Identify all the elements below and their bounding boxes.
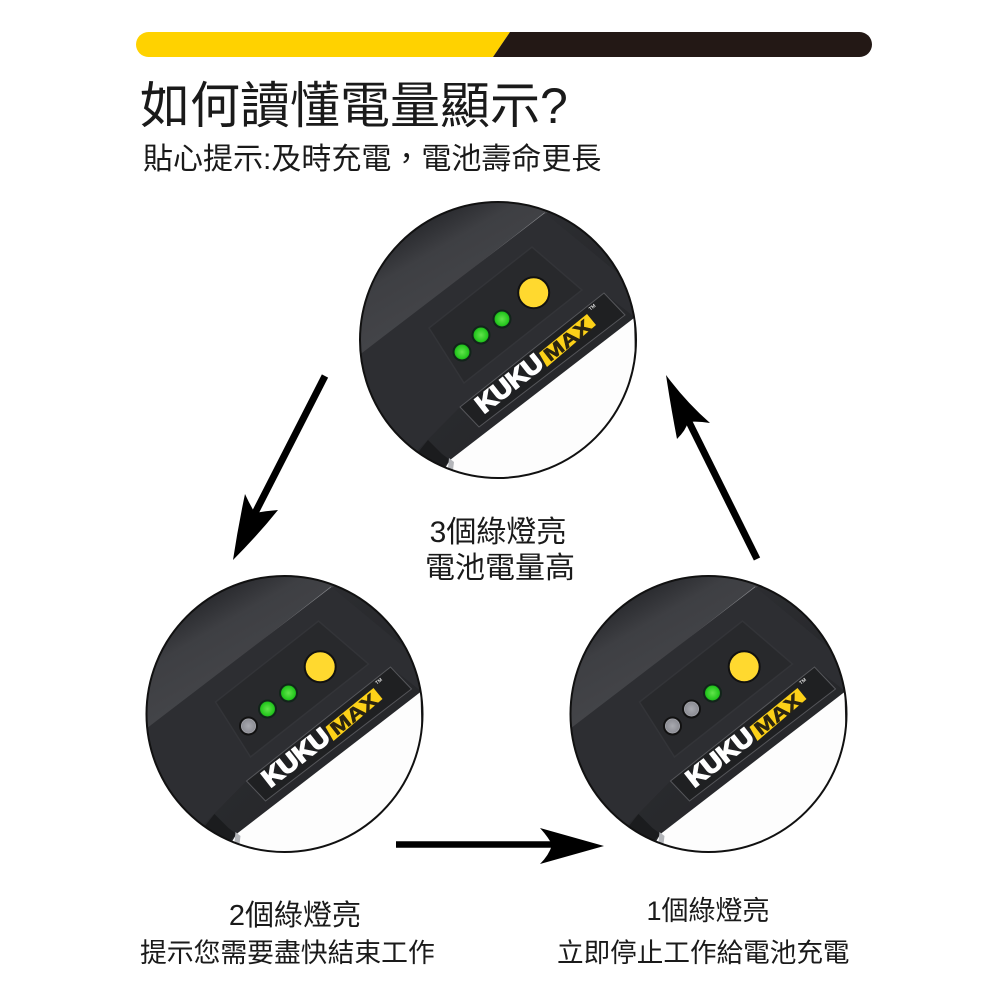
brand strip — [670, 667, 836, 801]
brand strip — [246, 667, 412, 801]
LED 3 — [494, 310, 510, 328]
brand strip: TM — [374, 677, 384, 686]
LED 3 — [280, 684, 297, 702]
control recess — [640, 621, 792, 757]
LED 1 off — [240, 718, 257, 734]
brand strip: TM — [588, 303, 597, 312]
brand strip — [460, 293, 625, 427]
LED 3 — [704, 684, 721, 702]
LED 1 off — [664, 718, 681, 734]
battery photo: one green light — [568, 574, 848, 854]
label: three lights: 3個綠燈亮 — [430, 516, 566, 549]
brand strip: KUKU — [470, 349, 549, 419]
label: two lights: 2個綠燈亮 — [229, 900, 361, 932]
brand strip: MAX — [327, 690, 382, 740]
battery photo: three green lights — [358, 200, 638, 480]
control recess — [429, 247, 582, 383]
brand strip: MAX — [751, 690, 806, 740]
brand strip: KUKU — [257, 723, 335, 793]
button — [729, 651, 760, 682]
label: battery high: 電池電量高 — [425, 552, 575, 585]
button — [305, 651, 336, 682]
arrow: bottom-right to top — [666, 375, 757, 559]
control recess — [216, 621, 368, 757]
subtitle: 貼心提示:及時充電，電池壽命更長 — [143, 143, 601, 176]
label: one light: 1個綠燈亮 — [646, 896, 770, 926]
LED 2 off — [683, 700, 700, 718]
brand strip: TM — [798, 677, 808, 686]
brand strip: KUKU — [681, 723, 759, 793]
label: finish work soon: 提示您需要盡快結束工作 — [140, 938, 435, 968]
button — [518, 277, 549, 308]
label: stop work and charge: 立即停止工作給電池充電 — [557, 938, 850, 968]
arrow: bottom-left to bottom-right — [396, 828, 604, 864]
battery photo: two green lights — [144, 574, 424, 854]
LED 2 — [259, 700, 276, 718]
LED 2 — [472, 326, 490, 344]
title: 如何讀懂電量顯示? — [140, 78, 568, 134]
header bar — [136, 32, 872, 57]
LED 1 — [454, 344, 470, 360]
arrow: top to bottom-left — [233, 376, 325, 560]
brand strip: MAX — [540, 316, 596, 366]
